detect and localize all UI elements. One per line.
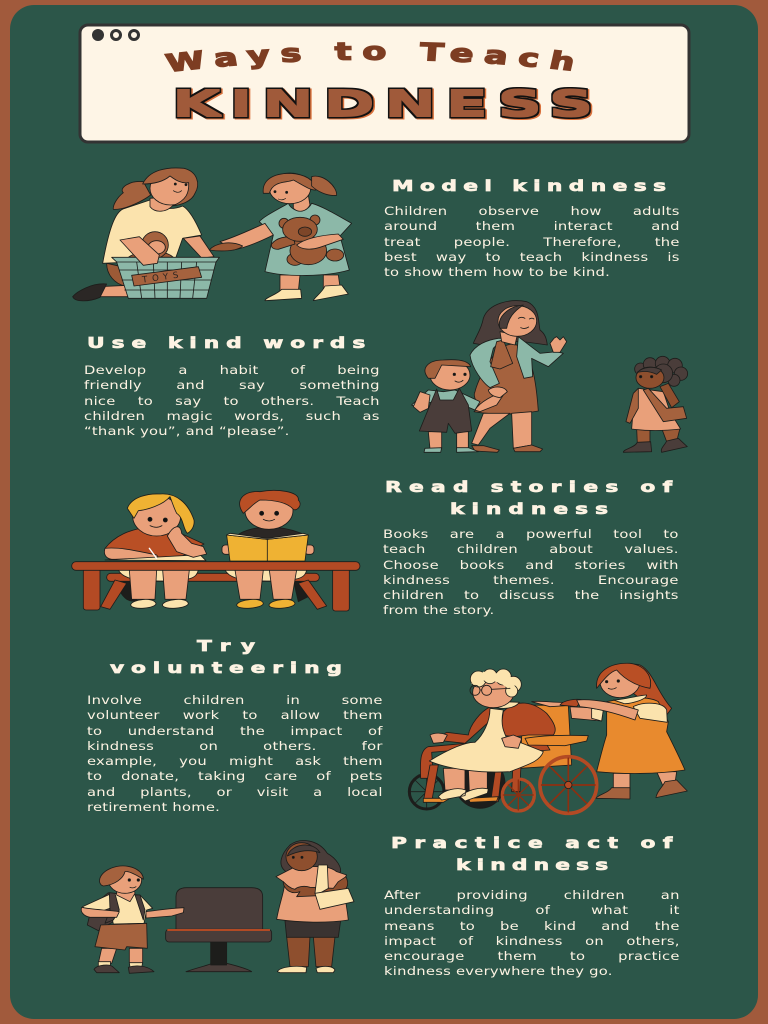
text: Practice act of kindness: means to be kind and the <box>384 919 680 933</box>
chair <box>166 888 272 972</box>
text: Model kindness: treat people. Therefore, the <box>384 235 680 249</box>
text: Read stories of kindness: Choose books and stories with <box>383 558 679 572</box>
text: Practice act of kindness <box>384 888 680 978</box>
text: Use kind words: nice to say to others. Teach <box>84 394 380 408</box>
heading: Try volunteering: volunteering <box>110 660 342 677</box>
text: Model kindness: best way to teach kindness is <box>384 250 680 264</box>
text: Try volunteering: and plants, or visit a local <box>87 785 383 799</box>
text: Try volunteering: example, you might ask them <box>87 754 383 768</box>
text: Use kind words: friendly and say something <box>84 378 380 392</box>
text: Use kind words: “thank you”, and “please”. <box>84 424 290 438</box>
text: Model kindness: to show them how to be kind. <box>384 265 610 279</box>
heading: Practice act of kindness: kindness <box>456 857 608 874</box>
illustration: woman and girl with toys <box>73 168 352 301</box>
text: Read stories of kindness: Books are a powerful tool to <box>383 527 679 541</box>
heading: Try volunteering <box>110 638 342 677</box>
text: Try volunteering: to donate, taking care of pets <box>87 769 383 783</box>
text: Try volunteering: to understand the impact of <box>87 724 383 738</box>
text: Read stories of kindness: children to discuss the insights <box>383 588 679 602</box>
text: Practice act of kindness: After providing children an <box>384 888 680 902</box>
standing woman <box>276 841 354 973</box>
text: Use kind words: Develop a habit of being <box>84 363 380 377</box>
text: Read stories of kindness: kindness themes. Encourage <box>383 573 679 587</box>
title line: Ways to Teach: Ways to Teach <box>164 42 573 72</box>
title line: KINDNESS: KINDNESS <box>172 83 593 125</box>
heading: Use kind words: Use kind words <box>87 335 365 352</box>
illustration: girl pushing elder in wheelchair <box>409 663 687 813</box>
illustration: woman with two children <box>412 301 688 452</box>
illustration: children reading at a bench <box>72 490 360 611</box>
title card <box>78 24 690 144</box>
text: Use kind words: children magic words, such as <box>84 409 380 423</box>
text: Read stories of kindness: from the story. <box>383 603 494 617</box>
text: Try volunteering: Involve children in some <box>87 693 383 707</box>
text: Try volunteering: retirement home. <box>87 800 220 814</box>
text: Model kindness <box>384 204 680 279</box>
text: Try volunteering: volunteer work to allow them <box>87 708 383 722</box>
heading: Read stories of kindness: kindness <box>450 501 608 518</box>
label: toys: TOYS <box>141 270 184 286</box>
text: Try volunteering: kindness on others. for <box>87 739 383 753</box>
illustration: boy offering chair to woman <box>81 841 354 973</box>
text: Read stories of kindness <box>383 527 679 617</box>
teddy bear <box>271 215 344 265</box>
heading: Model kindness: Model kindness <box>392 178 666 195</box>
girl with bag <box>637 428 680 443</box>
text: Try volunteering <box>87 693 383 814</box>
text: Practice act of kindness: understanding of what it <box>384 903 680 917</box>
text: Read stories of kindness: teach children about values. <box>383 542 679 556</box>
heading: Try volunteering: Try <box>197 638 255 655</box>
heading: Practice act of kindness: Practice act of <box>391 835 673 852</box>
text: Practice act of kindness: kindness everywhere they go. <box>384 964 613 978</box>
text: Model kindness: Children observe how adults <box>384 204 680 218</box>
heading: Practice act of kindness <box>391 835 673 874</box>
heading: Read stories of kindness <box>385 479 673 518</box>
text: Practice act of kindness: encourage them to practice <box>384 949 680 963</box>
text: Practice act of kindness: impact of kindness on others, <box>384 934 680 948</box>
heading: Read stories of kindness: Read stories of <box>385 479 673 496</box>
text: Use kind words <box>84 363 380 438</box>
text: Model kindness: around them interact and <box>384 219 680 233</box>
small boy <box>428 432 468 449</box>
